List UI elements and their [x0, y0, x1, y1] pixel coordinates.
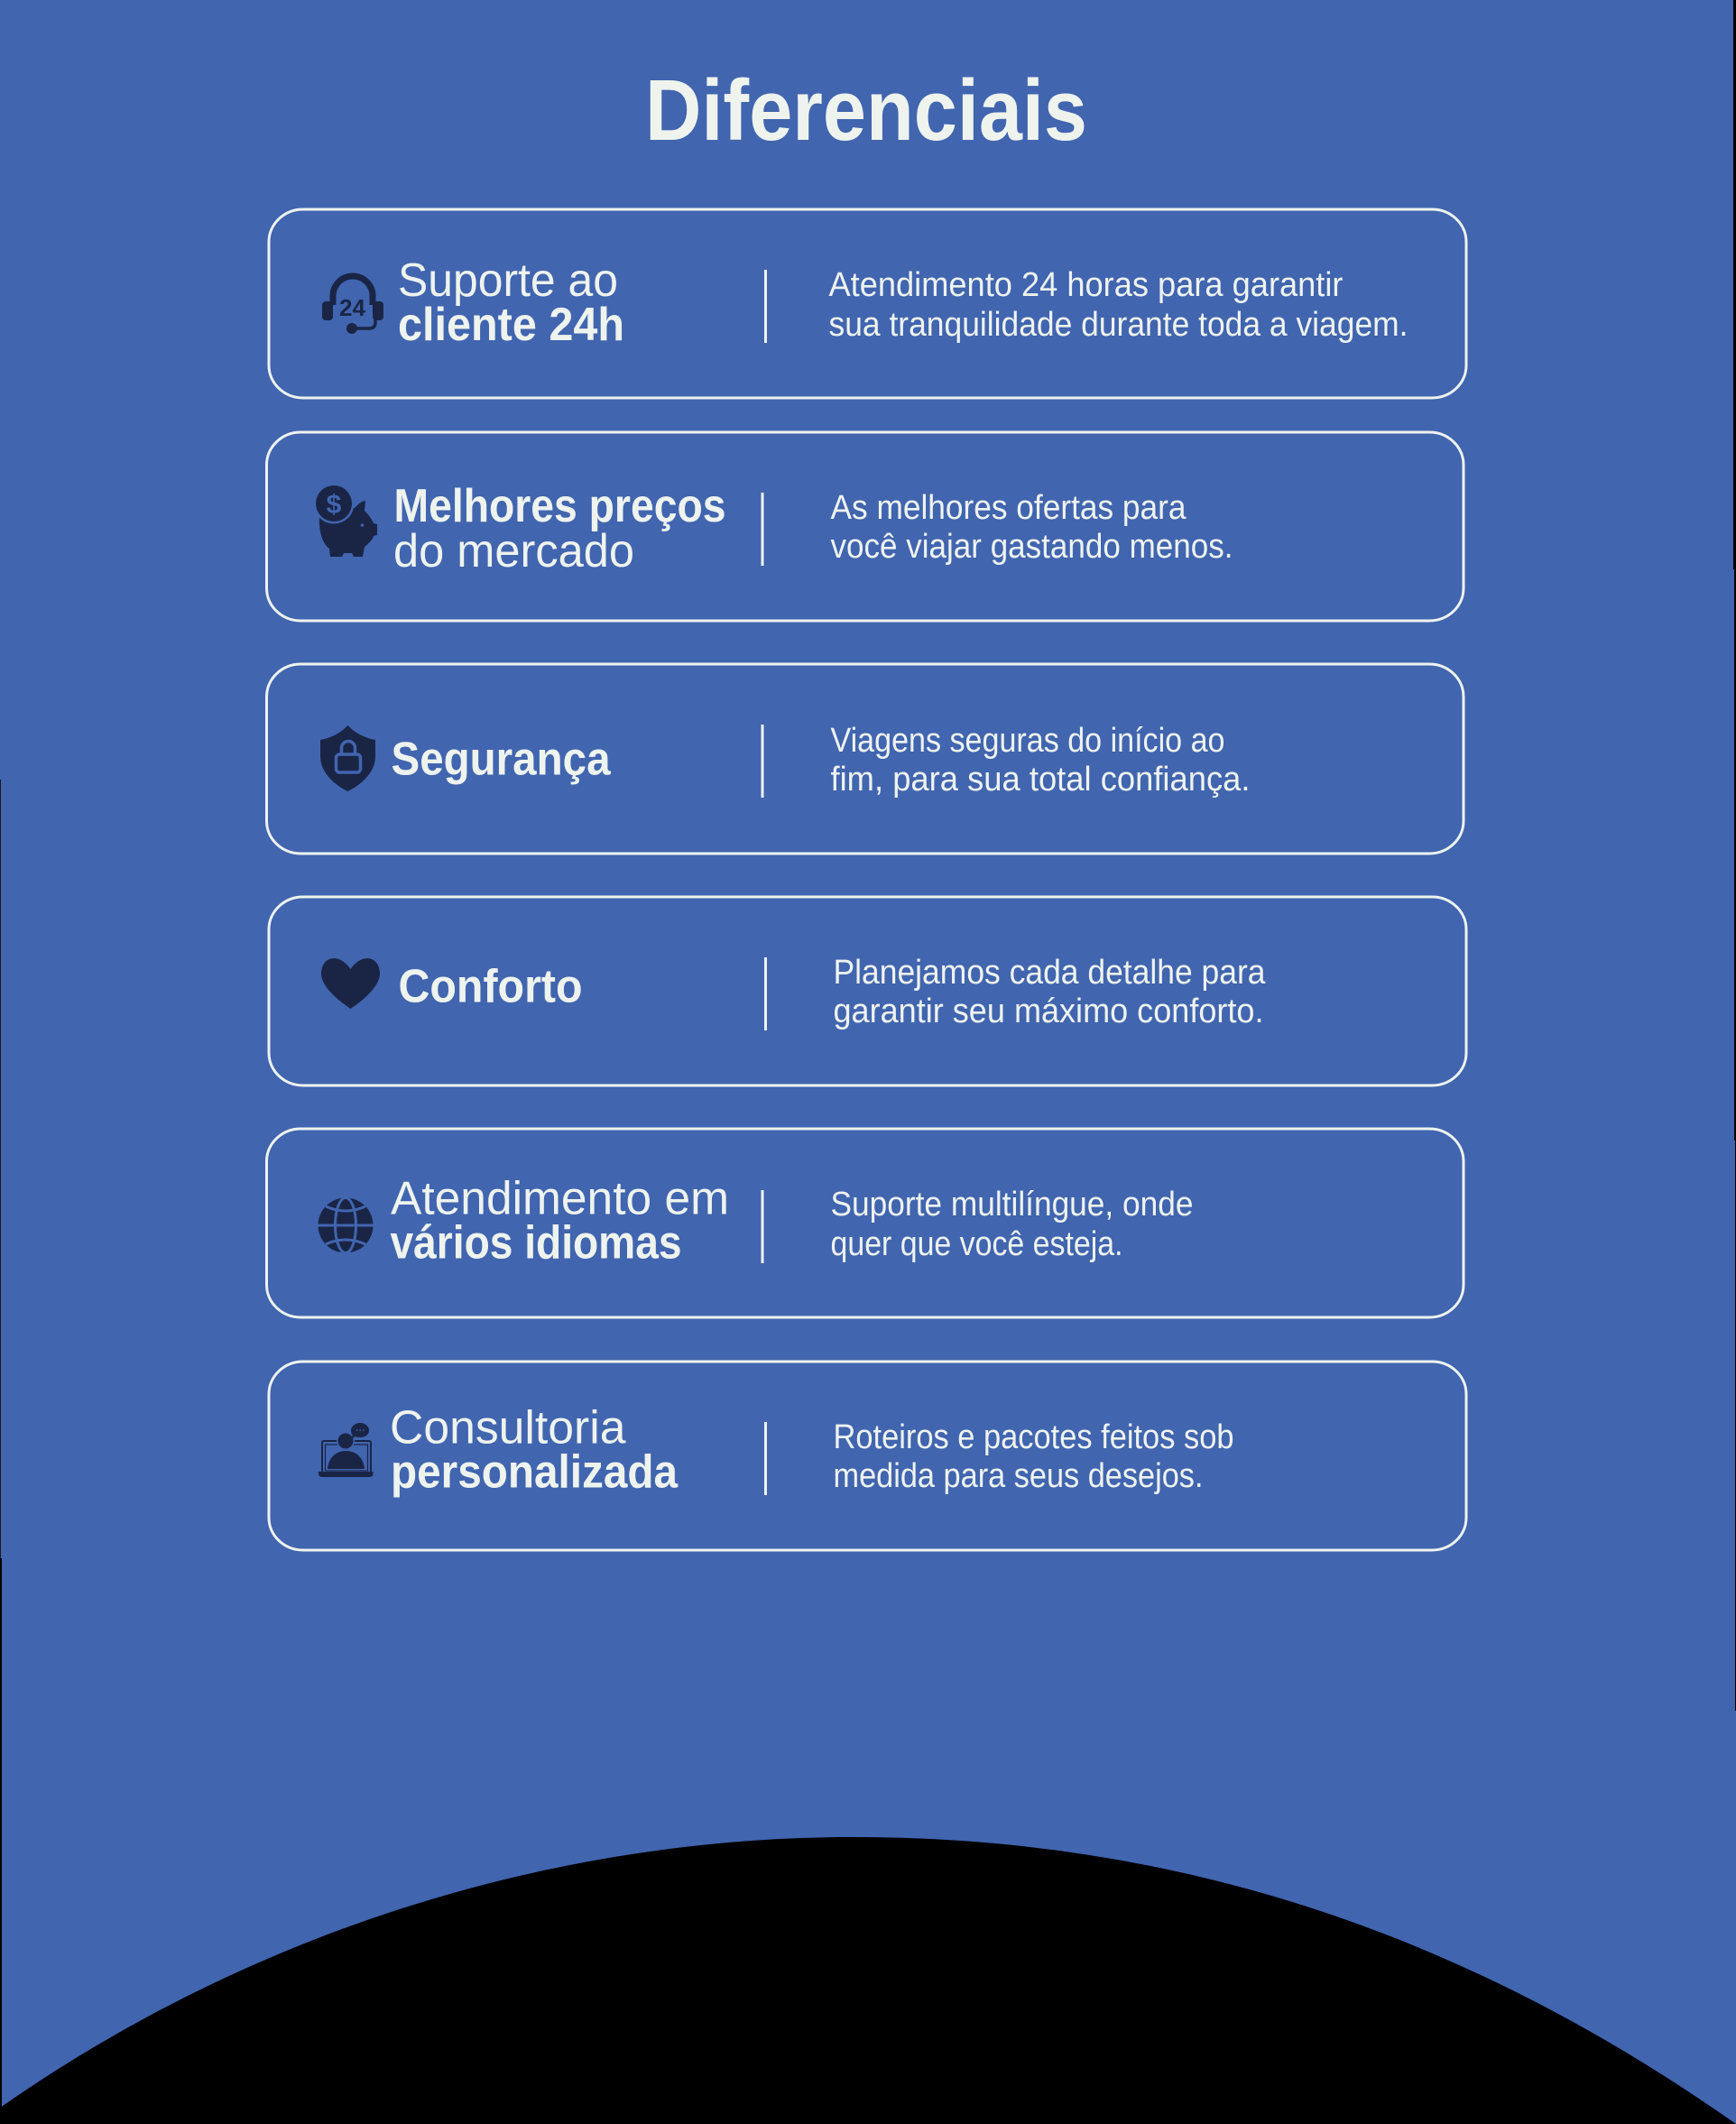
divider: [764, 957, 767, 1030]
description: Planejamos cada detalhe para: [834, 954, 1266, 992]
panel: conforto: [269, 897, 1466, 1085]
heading: vários idiomas: [390, 1216, 682, 1269]
heading: Melhores preços: [393, 480, 725, 532]
description: As melhores ofertas para: [830, 489, 1187, 527]
heading: Atendimento em: [391, 1173, 729, 1225]
icon: headset 24h: 24: [339, 294, 366, 321]
description: [834, 1418, 1234, 1495]
heading: personalizada: [391, 1445, 679, 1498]
heading: cliente 24h: [398, 299, 624, 351]
icon: laptop with person and speech bubble: [319, 1423, 374, 1477]
divider: [762, 1190, 763, 1263]
description: você viajar gastando menos.: [830, 528, 1233, 566]
black curved arch at bottom: [0, 1837, 1736, 2124]
panel: suporte ao cliente 24h: [269, 209, 1466, 398]
heading: [398, 254, 624, 351]
card outline: [267, 664, 1464, 854]
heading: do mercado: [393, 525, 634, 577]
description: fim, para sua total confiança.: [830, 761, 1251, 799]
heading: Conforto: [399, 960, 583, 1012]
panel: segurança: [267, 664, 1464, 854]
description: [828, 266, 1408, 344]
heading: [390, 1173, 729, 1269]
description: Atendimento 24 horas para garantir: [828, 266, 1344, 304]
heading: [393, 480, 725, 577]
description: Roteiros e pacotes feitos sob: [834, 1418, 1234, 1456]
icon: headset 24h: [322, 276, 383, 334]
heading: Consultoria: [390, 1402, 626, 1454]
icon: heart: [321, 958, 380, 1009]
divider: [762, 493, 763, 566]
description: sua tranquilidade durante toda a viagem.: [828, 306, 1408, 344]
card outline: [267, 432, 1464, 621]
icon: globe: [318, 1198, 374, 1252]
heading: Suporte ao: [398, 254, 618, 307]
description: quer que você esteja.: [830, 1225, 1122, 1263]
description: Suporte multilíngue, onde: [830, 1186, 1193, 1224]
icon: piggy bank with coin: [314, 484, 377, 557]
description: [830, 722, 1251, 799]
card outline: [269, 209, 1466, 398]
heading: Segurança: [392, 733, 611, 785]
heading: [390, 1402, 679, 1498]
description: [830, 1186, 1193, 1263]
panel: melhores preços: [267, 432, 1464, 621]
description: medida para seus desejos.: [834, 1457, 1204, 1495]
divider: [764, 270, 767, 343]
description: [830, 489, 1233, 566]
description: garantir seu máximo conforto.: [834, 993, 1263, 1030]
description: Viagens seguras do início ao: [830, 722, 1225, 760]
card outline: [269, 897, 1466, 1085]
panel: consultoria personalizada: [269, 1362, 1466, 1550]
divider: [764, 1422, 767, 1495]
icon: shield with padlock: [320, 725, 375, 791]
icon: piggy bank with coin: $: [327, 490, 342, 520]
divider: [762, 725, 763, 798]
card outline: [267, 1129, 1464, 1317]
description: [834, 954, 1266, 1030]
panel: atendimento em vários idiomas: [267, 1129, 1464, 1317]
title: Diferenciais: [645, 62, 1087, 159]
card outline: [269, 1362, 1466, 1550]
